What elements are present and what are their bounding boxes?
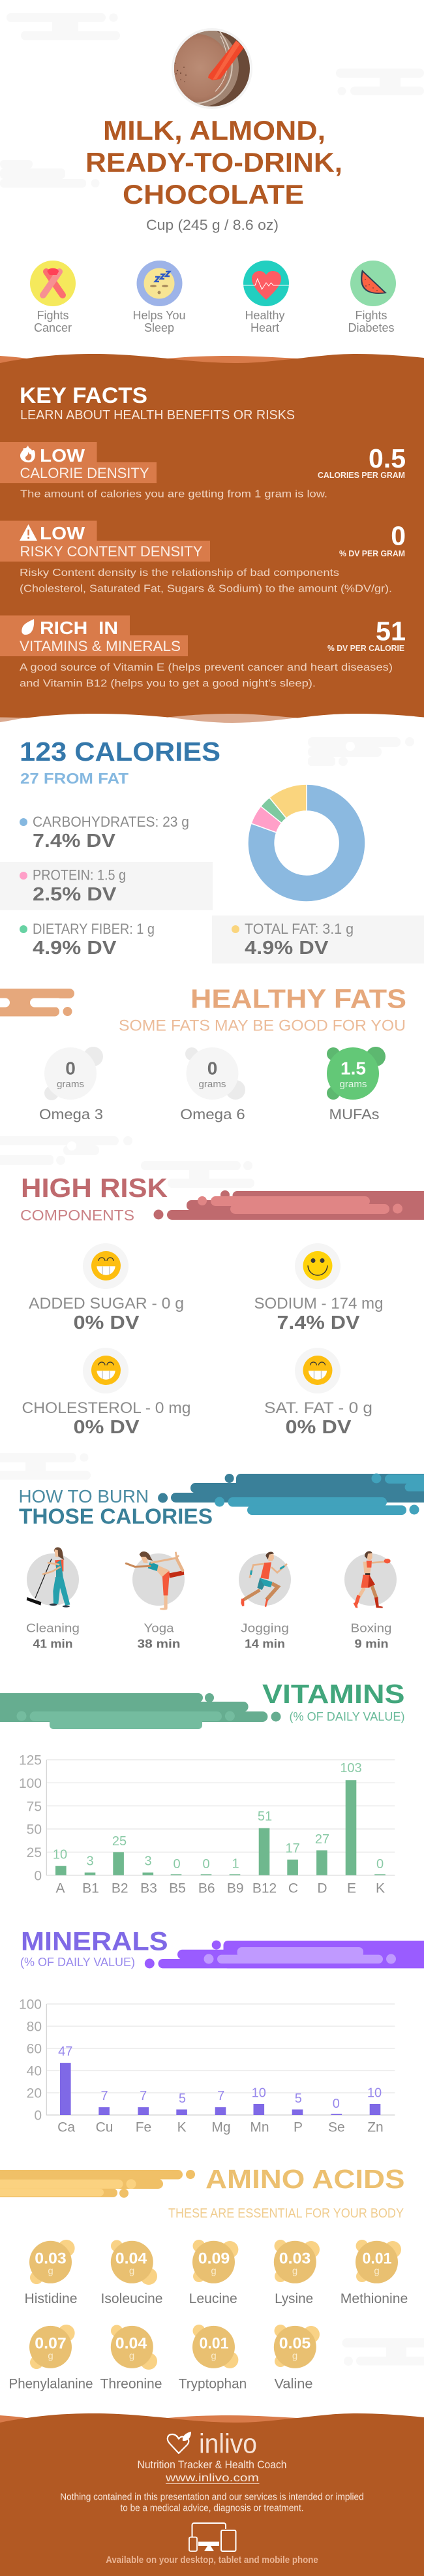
icon: warning triangle (20, 524, 37, 541)
bar chart: vitamins: 103 (340, 1761, 362, 1775)
bar chart: vitamins: 100 (19, 1776, 42, 1791)
background clouds: header (0, 13, 424, 188)
donut chart (248, 784, 365, 902)
bar chart: minerals: Se (328, 2120, 345, 2135)
bar chart: minerals: Mn (250, 2120, 269, 2135)
amino acids heading: AMINO ACIDS (205, 2164, 404, 2194)
decorative banner: high risk (154, 1190, 424, 1220)
legend: total fat: 4.9% DV (245, 938, 329, 959)
fact: rich in vitamins and minerals: % DV PER CALORIE (327, 644, 404, 653)
logo: inlivo (168, 2428, 257, 2459)
bar chart: vitamins: 17 (285, 1841, 300, 1856)
panel: calories (0, 737, 424, 964)
bar chart: minerals (19, 1997, 395, 2135)
healthy fats heading: HEALTHY FATS (190, 983, 406, 1013)
title (85, 115, 342, 210)
healthy fats subheading: SOME FATS MAY BE GOOD FOR YOU (119, 1017, 406, 1034)
legend: protein: 2.5% DV (33, 884, 117, 905)
logo: inlivo: inlivo (199, 2428, 257, 2459)
bar chart: vitamins: B12 (252, 1881, 277, 1896)
bar chart: minerals: 60 (27, 2041, 42, 2057)
bar chart: vitamins: 51 (258, 1809, 272, 1824)
bar chart: minerals: 0 (333, 2097, 340, 2111)
decorative banner: minerals (145, 1941, 424, 1968)
bar chart: minerals: Ca (57, 2120, 75, 2135)
benefit: healthy heart (243, 261, 289, 334)
amino: histidine: g (48, 2266, 53, 2277)
risk: added sugar (29, 1243, 184, 1333)
amino: phenylalanine: 0.07 (35, 2335, 67, 2353)
panel: amino acids (0, 2164, 408, 2391)
bar chart: vitamins: 0 (376, 1857, 384, 1871)
amino acids subheading: THESE ARE ESSENTIAL FOR YOUR BODY (168, 2206, 404, 2221)
activity: cleaning (26, 1547, 80, 1651)
disclaimer: to be a medical advice, diagnosis or treatment. (120, 2502, 304, 2514)
fat: omega 6: 0 (207, 1058, 217, 1079)
legend: dietary fiber: DIETARY FIBER: 1 g (33, 921, 155, 937)
burn heading line 1: HOW TO BURN (18, 1486, 149, 1506)
panel: vitamins (0, 1679, 404, 1896)
fact: risky content density (0, 521, 406, 594)
amino: threonine (100, 2325, 162, 2391)
bar chart: vitamins: B9 (227, 1881, 244, 1896)
risk: saturated fat: SAT. FAT - 0 g (264, 1399, 372, 1417)
amino: leucine: 0.09 (198, 2250, 230, 2267)
fact: rich in vitamins and minerals (0, 615, 406, 690)
icon: leaf (22, 619, 34, 635)
availability note: Available on your desktop, tablet and mobile phone (106, 2554, 318, 2566)
key facts subheading: LEARN ABOUT HEALTH BENEFITS OR RISKS (20, 408, 295, 422)
fact: risky content density: LOW (40, 523, 85, 543)
fat: MUFAs: grams (339, 1079, 367, 1090)
background clouds: calories (308, 737, 414, 766)
fat: omega 3: Omega 3 (39, 1106, 103, 1122)
bar chart: vitamins: B2 (112, 1881, 129, 1896)
fact: risky content density: (Cholesterol, Saturated Fat, Sugars & Sodium) to the amount (%DV/gr). (20, 584, 392, 594)
amino: tryptophan (179, 2325, 247, 2391)
amino: isoleucine (100, 2240, 163, 2306)
bar chart: vitamins: 125 (19, 1753, 42, 1768)
bar chart: minerals: 5 (295, 2091, 302, 2106)
legend: total fat (212, 915, 424, 964)
amino: threonine: 0.04 (115, 2335, 147, 2353)
bar chart: minerals: 0 (34, 2108, 42, 2123)
bar chart: vitamins: 0 (173, 1857, 181, 1871)
bar chart: vitamins: K (376, 1881, 385, 1896)
title: READY-TO-DRINK, (85, 147, 342, 178)
amino: isoleucine: g (129, 2266, 134, 2277)
amino: leucine: Leucine (189, 2291, 237, 2306)
legend: dietary fiber (20, 921, 155, 959)
activity: cleaning: 41 min (33, 1638, 73, 1651)
decorative banner: vitamins (0, 1693, 280, 1729)
decorative banner: burn (158, 1473, 424, 1515)
risk: cholesterol (22, 1348, 190, 1438)
fact: risky content density: RISKY CONTENT DENSITY (20, 543, 203, 560)
legend: carbohydrates: 7.4% DV (33, 831, 116, 851)
bar chart: vitamins: 10 (53, 1848, 67, 1862)
bar chart: minerals: 40 (27, 2063, 42, 2079)
benefit: fights cancer: Fights (37, 309, 69, 322)
amino: histidine: Histidine (25, 2291, 77, 2306)
amino: phenylalanine (9, 2325, 93, 2391)
fact: calorie density: The amount of calories you are getting from 1 gram is low. (20, 488, 327, 500)
bar chart: vitamins: 25 (112, 1834, 127, 1849)
serving size: Cup (245 g / 8.6 oz) (146, 217, 279, 233)
fact: risky content density: % DV PER GRAM (339, 549, 405, 558)
amino: valine: 0.05 (279, 2335, 310, 2353)
amino: methionine: g (374, 2266, 380, 2277)
benefit: helps you sleep: Sleep (144, 321, 174, 334)
fat: MUFAs: 1.5 (341, 1058, 366, 1079)
bar chart: vitamins: A (55, 1881, 65, 1896)
fact: rich in vitamins and minerals: RICH IN (40, 618, 118, 638)
amino: threonine: Threonine (100, 2377, 162, 2391)
photo: chocolate almond milk (172, 28, 252, 109)
fat: omega 6: Omega 6 (180, 1106, 245, 1122)
bar chart: minerals: P (294, 2120, 303, 2135)
vitamins heading: VITAMINS (262, 1679, 404, 1709)
activity: boxing (344, 1551, 397, 1651)
bar chart: vitamins: B6 (198, 1881, 215, 1896)
amino: phenylalanine: Phenylalanine (9, 2377, 93, 2391)
tagline: Nutrition Tracker & Health Coach (137, 2458, 287, 2471)
activity: jogging (239, 1551, 291, 1651)
amino: lysine: 0.03 (279, 2250, 310, 2267)
panel: healthy fats (0, 983, 406, 1122)
benefit: fights diabetes: Fights (355, 309, 387, 322)
bar chart: minerals: 80 (27, 2019, 42, 2035)
bar chart: vitamins: B3 (140, 1881, 157, 1896)
fat: omega 3: 0 (65, 1058, 76, 1079)
bar chart: minerals: 7 (140, 2089, 147, 2103)
benefit: fights diabetes (348, 261, 396, 334)
amino: methionine: Methionine (341, 2291, 408, 2306)
amino: leucine: g (211, 2266, 217, 2277)
fact: rich in vitamins and minerals: A good source of Vitamin E (helps prevent cancer and heart diseases) (20, 662, 393, 673)
bar chart: minerals: 47 (58, 2044, 72, 2059)
high risk heading: HIGH RISK (21, 1173, 168, 1203)
activity: jogging: Jogging (241, 1622, 289, 1635)
amino: isoleucine: Isoleucine (100, 2291, 163, 2306)
fat: omega 3 (39, 1047, 103, 1122)
icon: devices (189, 2523, 236, 2551)
amino: methionine (341, 2240, 408, 2306)
risk: added sugar: ADDED SUGAR - 0 g (29, 1295, 184, 1312)
fact: calorie density: LOW (40, 445, 85, 466)
legend: dietary fiber: 4.9% DV (33, 938, 117, 959)
decorative banner: healthy fats (0, 989, 74, 1016)
activity: yoga (126, 1551, 185, 1651)
risk: saturated fat: 0% DV (286, 1417, 352, 1438)
bar chart: minerals: Zn (367, 2120, 384, 2135)
bar chart: minerals: 7 (217, 2089, 224, 2103)
amino: valine: g (292, 2350, 297, 2361)
bar chart: minerals: 20 (27, 2086, 42, 2101)
minerals heading: MINERALS (21, 1928, 168, 1956)
bar chart: vitamins: 1 (232, 1857, 239, 1871)
bar chart: minerals: 5 (179, 2091, 186, 2106)
benefit: healthy heart: Healthy (245, 309, 285, 322)
amino: lysine: g (292, 2266, 297, 2277)
activity: yoga: Yoga (144, 1622, 175, 1635)
amino: histidine (25, 2240, 77, 2306)
bar chart: vitamins: B5 (169, 1881, 186, 1896)
bar chart: minerals: 10 (367, 2086, 382, 2100)
bar chart: vitamins: 3 (144, 1854, 152, 1869)
amino: valine (274, 2325, 320, 2391)
risk: added sugar: 0% DV (73, 1312, 140, 1333)
risk: saturated fat (264, 1348, 372, 1438)
activity: yoga: 38 min (137, 1638, 180, 1651)
fact: calorie density: CALORIE DENSITY (20, 465, 149, 481)
bar chart: vitamins: 50 (27, 1822, 42, 1837)
panel: key facts (0, 354, 424, 723)
amino: methionine: 0.01 (363, 2250, 391, 2267)
title: CHOCOLATE (123, 179, 304, 210)
risk: sodium: 7.4% DV (277, 1312, 360, 1333)
benefit: fights cancer: Cancer (34, 321, 72, 334)
bar chart: minerals: K (177, 2120, 187, 2135)
legend: carbohydrates (20, 814, 189, 851)
activity: boxing: 9 min (355, 1638, 389, 1651)
fat: omega 3: grams (57, 1079, 84, 1090)
bar chart: vitamins: B1 (82, 1881, 99, 1896)
benefit: fights diabetes: Diabetes (348, 321, 395, 334)
activity: boxing: Boxing (351, 1622, 391, 1635)
fat: MUFAs (327, 1047, 386, 1122)
calories heading: 123 CALORIES (20, 737, 220, 767)
bar chart: vitamins: 3 (86, 1854, 94, 1869)
bar chart: minerals: Cu (96, 2120, 113, 2135)
bar chart: minerals: Fe (136, 2120, 151, 2135)
benefit: healthy heart: Heart (250, 321, 279, 334)
bar chart: vitamins: 27 (315, 1832, 329, 1847)
bar chart: vitamins: E (347, 1881, 356, 1896)
fact: calorie density: 0.5 (369, 443, 406, 473)
fat: MUFAs: MUFAs (329, 1106, 380, 1122)
amino: valine: Valine (274, 2377, 313, 2391)
decorative banner: amino acids (0, 2170, 195, 2198)
risk: cholesterol: 0% DV (73, 1417, 140, 1438)
bar chart: minerals: Mg (211, 2120, 231, 2135)
bar chart: vitamins: 0 (34, 1868, 42, 1883)
amino: tryptophan: 0.01 (200, 2335, 228, 2353)
amino: histidine: 0.03 (35, 2250, 67, 2267)
disclaimer: Nothing contained in this presentation and our services is intended or implied (60, 2492, 364, 2502)
activity: cleaning: Cleaning (26, 1622, 80, 1635)
panel: minerals (19, 1928, 424, 2135)
background clouds: high risk (0, 1136, 254, 1480)
amino: lysine (274, 2240, 320, 2306)
fact: risky content density: Risky Content density is the relationship of bad components (20, 567, 339, 579)
benefit: helps you sleep (132, 261, 186, 334)
legend: protein: PROTEIN: 1.5 g (33, 867, 126, 883)
legend: total fat: TOTAL FAT: 3.1 g (245, 921, 354, 937)
benefit: fights cancer (30, 261, 76, 334)
fat: omega 6: grams (198, 1079, 226, 1090)
amino: threonine: g (129, 2350, 134, 2361)
vitamins subheading: (% OF DAILY VALUE) (290, 1709, 404, 1723)
key facts heading: KEY FACTS (20, 383, 147, 408)
activity: jogging: 14 min (245, 1638, 285, 1651)
background cloud: amino acids (342, 2338, 424, 2366)
website link: www.inlivo.com (165, 2472, 259, 2484)
icon: flame (20, 445, 35, 462)
calories from fat: 27 FROM FAT (20, 770, 129, 787)
title: MILK, ALMOND, (103, 115, 326, 146)
fact: rich in vitamins and minerals: VITAMINS & MINERALS (20, 638, 181, 654)
amino: phenylalanine: g (48, 2350, 53, 2361)
panel: footer (0, 2413, 424, 2576)
amino: lysine: Lysine (275, 2291, 313, 2306)
risk: sodium: SODIUM - 174 mg (254, 1295, 384, 1312)
fat: omega 6 (180, 1047, 245, 1122)
bar chart: vitamins: 0 (202, 1857, 210, 1871)
fact: risky content density: 0 (391, 521, 406, 551)
risk: cholesterol: CHOLESTEROL - 0 mg (22, 1399, 190, 1417)
amino: tryptophan: Tryptophan (179, 2377, 247, 2391)
bar chart: vitamins (19, 1753, 395, 1896)
disclaimer (60, 2492, 364, 2514)
bar chart: minerals: 10 (252, 2086, 266, 2100)
bar chart: vitamins: D (317, 1881, 327, 1896)
risk: sodium (254, 1243, 384, 1333)
bar chart: minerals: 7 (100, 2089, 108, 2103)
high risk subheading: COMPONENTS (20, 1207, 134, 1224)
benefit: helps you sleep: Helps You (132, 309, 186, 322)
fact: rich in vitamins and minerals: 51 (376, 616, 406, 646)
legend: protein (0, 862, 213, 910)
amino: leucine (189, 2240, 238, 2306)
panel: high risk components (20, 1173, 424, 1438)
legend: carbohydrates: CARBOHYDRATES: 23 g (33, 814, 189, 830)
fact: calorie density: CALORIES PER GRAM (318, 471, 405, 480)
minerals subheading: (% OF DAILY VALUE) (20, 1955, 135, 1969)
fact: calorie density (0, 442, 406, 500)
bar chart: minerals: 100 (19, 1997, 42, 2012)
amino: tryptophan: g (211, 2350, 217, 2361)
bar chart: vitamins: 25 (27, 1845, 42, 1860)
panel: how to burn those calories (18, 1473, 424, 1651)
bar chart: vitamins: C (288, 1881, 298, 1896)
fact: rich in vitamins and minerals: and Vitamin B12 (helps you to get a good night's sleep). (20, 678, 316, 690)
bar chart: vitamins: 75 (27, 1799, 42, 1814)
amino: isoleucine: 0.04 (115, 2250, 147, 2267)
burn heading line 2: THOSE CALORIES (19, 1504, 213, 1528)
